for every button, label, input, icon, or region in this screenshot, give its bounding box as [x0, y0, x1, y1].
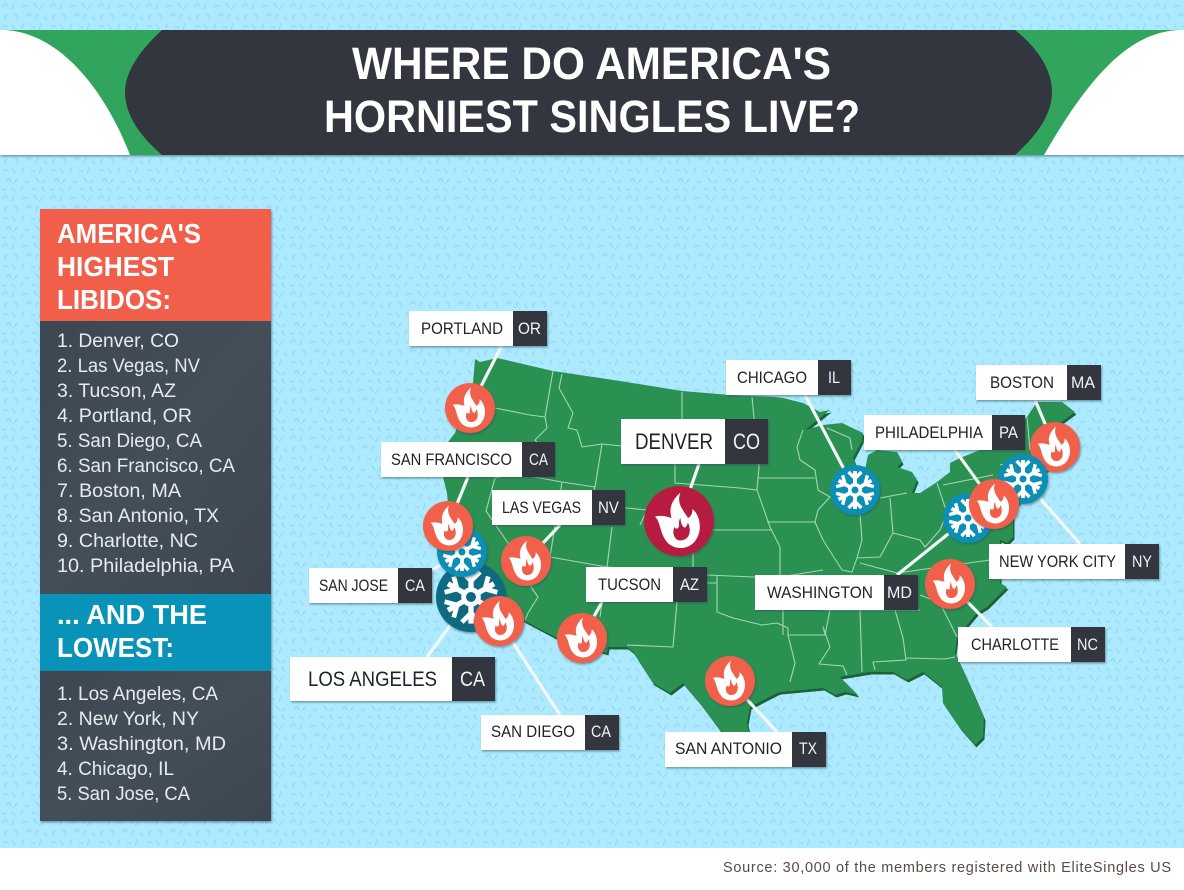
title banner [0, 30, 1184, 155]
label: San Diego: SAN DIEGO [491, 723, 575, 741]
icon: San Antonio flame [705, 656, 755, 706]
label: San Antonio: TX [799, 740, 817, 758]
label: Denver: DENVER [635, 429, 713, 454]
label: San Antonio: SAN ANTONIO [675, 740, 782, 758]
label: Charlotte: CHARLOTTE [971, 636, 1059, 654]
label: Las Vegas: LAS VEGAS [502, 499, 581, 517]
label: San Jose [309, 568, 432, 603]
label: Chicago: IL [828, 369, 840, 387]
panel: highest libidos heading: AMERICA'S [57, 218, 201, 249]
icon: Tucson flame [557, 613, 607, 663]
list: highest libidos: 7. Boston, MA [57, 481, 181, 502]
panel: highest libidos heading: LIBIDOS: [57, 284, 171, 315]
label: Portland: PORTLAND [421, 320, 503, 338]
label: Denver: CO [733, 429, 760, 454]
list: lowest libidos: 3. Washington, MD [57, 734, 226, 755]
label: San Antonio [665, 732, 826, 767]
icon: New York City snowflake [998, 454, 1048, 504]
label: Boston: BOSTON [990, 374, 1054, 392]
label: New York City: NEW YORK CITY [999, 553, 1116, 571]
icon: Philadelphia flame [969, 479, 1019, 529]
panel: city rankings [40, 209, 271, 821]
icon: San Jose snowflake [437, 527, 487, 577]
label: Las Vegas: NV [598, 499, 619, 517]
label: San Jose: SAN JOSE [319, 577, 388, 595]
panel: highest libidos heading: HIGHEST [57, 251, 174, 282]
panel: lowest libidos heading: LOWEST: [57, 632, 174, 663]
icon: Los Angeles snowflake [436, 562, 506, 632]
label: Chicago [726, 360, 851, 395]
label: New York City: NY [1132, 553, 1152, 571]
footer: source note: Source: 30,000 of the members registered with EliteSingles US [723, 860, 1171, 876]
list: highest libidos: 9. Charlotte, NC [57, 531, 198, 552]
list: highest libidos: 6. San Francisco, CA [57, 456, 235, 477]
list: highest libidos: 1. Denver, CO [57, 331, 179, 352]
label: Tucson: TUCSON [598, 576, 661, 594]
label: Denver [621, 419, 768, 464]
icon: Las Vegas flame [501, 536, 551, 586]
title banner: WHERE DO AMERICA'S [352, 38, 831, 89]
list: lowest libidos: 1. Los Angeles, CA [57, 684, 218, 705]
list: lowest libidos [40, 671, 271, 821]
icon: San Diego flame [474, 596, 524, 646]
label: San Francisco: SAN FRANCISCO [391, 451, 512, 469]
list: lowest libidos: 5. San Jose, CA [57, 784, 190, 805]
label: Charlotte: NC [1077, 636, 1098, 654]
icon: Washington snowflake [943, 493, 993, 543]
connector lines [427, 345, 1080, 732]
icon: San Francisco flame [423, 501, 473, 551]
label: San Francisco [381, 442, 555, 477]
list: highest libidos: 10. Philadelphia, PA [57, 556, 234, 577]
icon: Charlotte flame [925, 559, 975, 609]
icon: Denver flame [644, 486, 714, 556]
list: highest libidos: 5. San Diego, CA [57, 431, 202, 452]
label: Washington: WASHINGTON [767, 584, 873, 602]
panel: lowest libidos heading [40, 594, 271, 671]
label: San Diego: CA [591, 723, 611, 741]
list: highest libidos: 8. San Antonio, TX [57, 506, 219, 527]
label: Charlotte [958, 627, 1105, 662]
list: highest libidos: 2. Las Vegas, NV [57, 356, 200, 377]
icon: Boston flame [1030, 422, 1080, 472]
list: lowest libidos: 2. New York, NY [57, 709, 199, 730]
label: Chicago: CHICAGO [737, 369, 807, 387]
label: New York City [989, 544, 1159, 579]
icon: Portland flame [445, 383, 495, 433]
footer: source note [0, 848, 1184, 890]
label: Washington [755, 575, 918, 610]
label: Philadelphia [864, 415, 1025, 450]
label: Washington: MD [887, 584, 912, 602]
label: Portland [409, 311, 547, 346]
list: highest libidos [40, 321, 271, 594]
panel: highest libidos heading [40, 209, 271, 321]
label: Philadelphia: PA [999, 424, 1018, 442]
list: lowest libidos: 4. Chicago, IL [57, 759, 174, 780]
label: San Diego [481, 715, 619, 750]
label: Tucson [586, 567, 707, 602]
label: Tucson: AZ [680, 576, 699, 594]
label: Boston [976, 365, 1101, 400]
map of the United States [443, 358, 1076, 748]
label: Los Angeles: LOS ANGELES [308, 668, 437, 691]
label: Philadelphia: PHILADELPHIA [875, 424, 983, 442]
label: Los Angeles [290, 657, 495, 701]
icon: Chicago snowflake [830, 465, 880, 515]
label: San Francisco: CA [529, 451, 548, 469]
label: Boston: MA [1071, 374, 1095, 392]
label: Los Angeles: CA [460, 668, 485, 691]
label: San Jose: CA [405, 577, 425, 595]
list: highest libidos: 3. Tucson, AZ [57, 381, 176, 402]
label: Las Vegas [492, 490, 625, 525]
panel: lowest libidos heading: ... AND THE [57, 599, 207, 630]
title banner: HORNIEST SINGLES LIVE? [324, 91, 860, 142]
label: Portland: OR [518, 320, 541, 338]
list: highest libidos: 4. Portland, OR [57, 406, 192, 427]
